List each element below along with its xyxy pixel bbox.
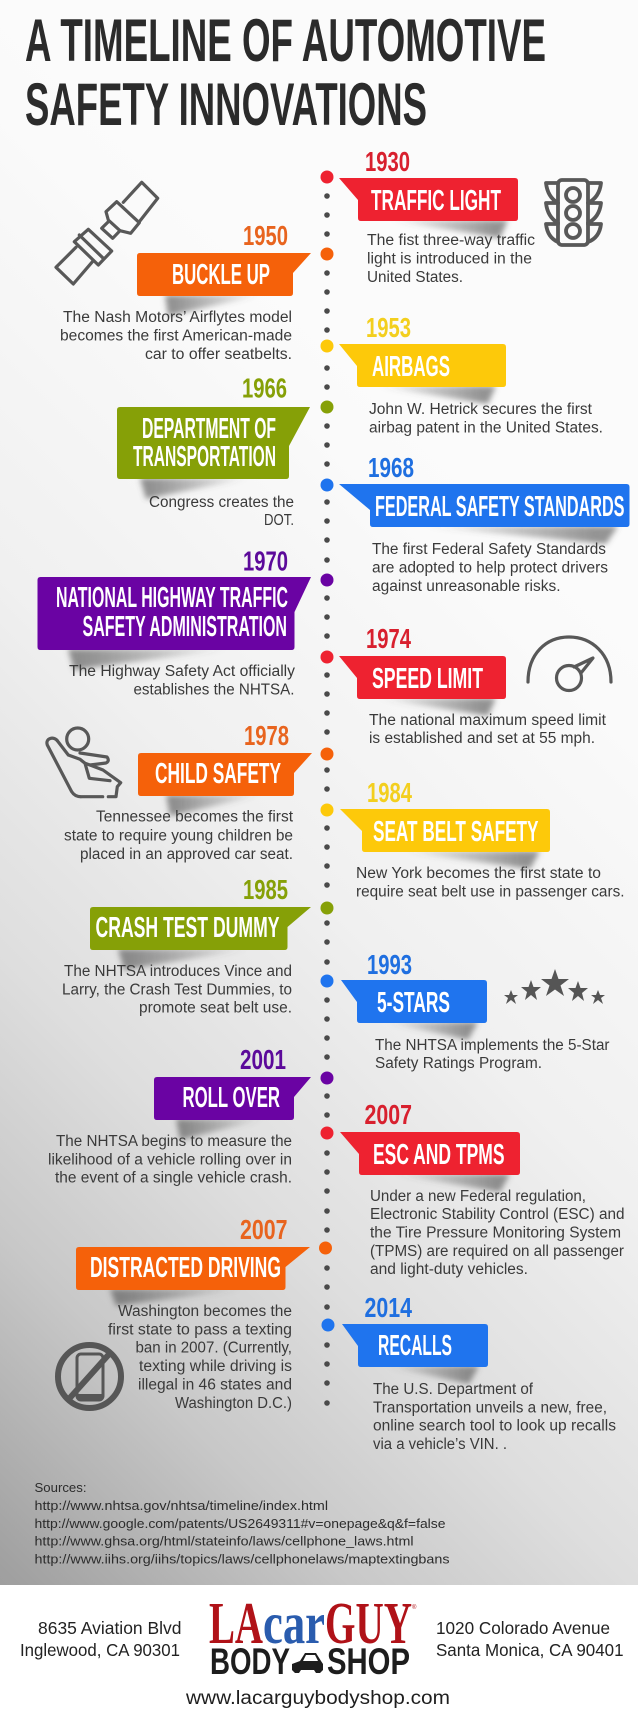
panel: 2007 distracted driving: illegal in 46 states and [138, 1376, 292, 1394]
panel: 1985 crash test dummy: The NHTSA introduces Vince and [64, 963, 292, 980]
panel: 2007 distracted driving: first state to pass a texting [108, 1322, 292, 1338]
panel: 1984 seat belt safety: 1984 [367, 777, 412, 808]
logo: BODY [210, 1641, 290, 1682]
panel: 1978 child safety: Tennessee becomes the first [96, 808, 294, 826]
panel: 2014 recalls [342, 1292, 616, 1453]
panel: 2014 recalls: The U.S. Department of [373, 1381, 534, 1398]
panel: 1974 speed limit: is established and set at 55 mph. [369, 730, 595, 747]
panel: 1978 child safety: state to require young children be [64, 828, 293, 844]
logo: car [263, 1590, 325, 1656]
right address: Santa Monica, CA 90401 [436, 1640, 624, 1660]
panel: 1974 speed limit: The national maximum speed limit [369, 712, 607, 729]
panel: 1966 department of transportation: 1966 [242, 372, 287, 404]
panel: 2007 esc and tpms: the Tire Pressure Monitoring System [370, 1224, 621, 1242]
panel: 1974 speed limit: SPEED LIMIT [372, 663, 483, 695]
panel: 2007 distracted driving: DISTRACTED DRIVING [90, 1252, 281, 1284]
panel: 2001 roll over: the event of a single vehicle crash. [55, 1170, 292, 1186]
panel: 1950 buckle up [60, 220, 311, 363]
panel: 1970 nhtsa: establishes the NHTSA. [134, 682, 294, 698]
panel: 1950 buckle up: car to offer seatbelts. [145, 346, 292, 363]
panel: 2001 roll over: The NHTSA begins to measure the [56, 1133, 292, 1150]
panel: 1985 crash test dummy: CRASH TEST DUMMY [96, 912, 280, 944]
panel: 1953 airbags: airbag patent in the United States. [369, 420, 603, 436]
panel: 1970 nhtsa: 1970 [243, 546, 288, 576]
panel: 2007 distracted driving: Washington D.C.) [175, 1395, 292, 1412]
panel: 2007 distracted driving: texting while driving is [139, 1358, 292, 1375]
panel: 1985 crash test dummy: 1985 [243, 874, 288, 905]
icon: speedometer [528, 637, 611, 690]
panel: 1966 department of transportation: DEPARTMENT OF [142, 413, 276, 445]
sources: http://www.ghsa.org/html/stateinfo/laws/cellphone_laws.html [34, 1534, 414, 1548]
panel: 2001 roll over: likelihood of a vehicle rolling over in [48, 1152, 292, 1168]
icon: child car seat [47, 728, 121, 797]
icon: traffic light [546, 180, 601, 245]
panel: 1966 department of transportation: Congress creates the [149, 494, 294, 511]
panel: 1968 federal safety standards: against unreasonable risks. [372, 578, 560, 595]
panel: 2014 recalls: via a vehicle’s VIN. . [373, 1436, 507, 1453]
panel: 1978 child safety: placed in an approved car seat. [80, 846, 293, 863]
panel: 1966 department of transportation [117, 372, 310, 529]
website: www.lacarguybodyshop.com [185, 1688, 450, 1709]
panel: 1968 federal safety standards: are adopted to help protect drivers [372, 560, 608, 576]
panel: 2014 recalls: Transportation unveils a new, free, [373, 1400, 607, 1416]
panel: 2007 esc and tpms: 2007 [364, 1099, 412, 1130]
timeline dotted spine [324, 193, 330, 1406]
logo: ® [412, 1604, 417, 1611]
panel: 1930 traffic light: 1930 [365, 146, 410, 177]
panel: 1985 crash test dummy: promote seat belt use. [139, 1000, 292, 1016]
panel: 1970 nhtsa: The Highway Safety Act officially [69, 663, 295, 680]
panel: 1930 traffic light: The fist three-way traffic [367, 232, 535, 249]
sources: http://www.nhtsa.gov/nhtsa/timeline/index.html [34, 1498, 328, 1513]
panel: 1953 airbags: John W. Hetrick secures the first [369, 401, 593, 418]
panel: 1985 crash test dummy [62, 874, 311, 1016]
panel: 1984 seat belt safety: New York becomes the first state to [356, 865, 601, 882]
panel: 2001 roll over: ROLL OVER [182, 1082, 280, 1114]
panel: 2007 distracted driving: Washington becomes the [118, 1303, 292, 1320]
panel: 2007 distracted driving: ban in 2007. (Currently, [136, 1340, 292, 1356]
panel: 1970 nhtsa [38, 546, 311, 698]
panel: 2014 recalls: 2014 [364, 1292, 412, 1323]
panel: 1930 traffic light: TRAFFIC LIGHT [371, 185, 501, 217]
left address: Inglewood, CA 90301 [20, 1640, 180, 1660]
sources [34, 1480, 450, 1566]
right address [436, 1618, 624, 1660]
panel: 1978 child safety: 1978 [244, 720, 289, 751]
panel: 1993 5-stars: The NHTSA implements the 5-Star [375, 1037, 610, 1054]
sources: http://www.iihs.org/iihs/topics/laws/cellphonelaws/maptextingbans [34, 1552, 450, 1566]
sources: http://www.google.com/patents/US2649311#v=onepage&q&f=false [34, 1516, 445, 1531]
panel: 2007 esc and tpms: (TPMS) are required on all passenger [370, 1243, 624, 1260]
panel: 1966 department of transportation: DOT. [264, 512, 294, 529]
panel: 1970 nhtsa: SAFETY ADMINISTRATION [82, 611, 287, 643]
panel: 1993 5-stars: 5-STARS [377, 987, 450, 1019]
panel: 1950 buckle up: becomes the first American-made [60, 328, 292, 344]
panel: 2007 esc and tpms: Under a new Federal regulation, [370, 1188, 586, 1205]
panel: 1974 speed limit: 1974 [366, 623, 411, 654]
panel: 1970 nhtsa: NATIONAL HIGHWAY TRAFFIC [56, 582, 288, 614]
panel: 1984 seat belt safety [340, 777, 624, 900]
panel: 1974 speed limit [339, 623, 607, 747]
footer [0, 1585, 638, 1727]
panel: 1953 airbags [339, 312, 603, 436]
panel: 1985 crash test dummy: Larry, the Crash Test Dummies, to [62, 982, 292, 998]
panel: 2007 esc and tpms: ESC AND TPMS [373, 1139, 504, 1171]
logo: LA [209, 1590, 263, 1656]
panel: 2007 esc and tpms [340, 1099, 624, 1278]
panel: 1984 seat belt safety: require seat belt use in passenger cars. [356, 884, 624, 900]
logo: GUY [325, 1590, 412, 1656]
icon: seatbelt [56, 182, 158, 284]
panel: 2007 esc and tpms: and light-duty vehicles. [370, 1261, 528, 1278]
right address: 1020 Colorado Avenue [436, 1618, 610, 1638]
panel: 1950 buckle up: 1950 [243, 220, 288, 251]
panel: 1968 federal safety standards: 1968 [368, 452, 414, 483]
left address [20, 1618, 182, 1660]
logo: SHOP [327, 1641, 410, 1682]
panel: 2001 roll over [48, 1044, 311, 1186]
icon: no phone [58, 1345, 121, 1408]
panel: 1953 airbags: AIRBAGS [372, 351, 450, 383]
panel: 1993 5-stars: Safety Ratings Program. [375, 1055, 542, 1072]
panel: 2014 recalls: online search tool to look up recalls [373, 1418, 616, 1434]
panel: 1950 buckle up: The Nash Motors’ Airflytes model [63, 309, 292, 326]
panel: 1968 federal safety standards [339, 452, 630, 595]
panel: 1993 5-stars [341, 949, 610, 1072]
logo [209, 1590, 417, 1682]
timeline coloured markers [319, 170, 334, 1332]
panel: 1950 buckle up: BUCKLE UP [172, 259, 270, 291]
panel: 1930 traffic light: light is introduced in the [367, 250, 532, 268]
sources: Sources: [34, 1480, 86, 1495]
panel: 2007 esc and tpms: Electronic Stability Control (ESC) and [370, 1206, 624, 1223]
panel: 2001 roll over: 2001 [240, 1044, 286, 1075]
title [25, 7, 546, 138]
icon: five stars [504, 969, 605, 1004]
panel: 2007 distracted driving: 2007 [240, 1214, 288, 1245]
panel: 1966 department of transportation: TRANSPORTATION [133, 441, 276, 473]
panel: 1993 5-stars: 1993 [367, 949, 412, 980]
panel: 2014 recalls: RECALLS [378, 1330, 452, 1362]
panel: 1953 airbags: 1953 [366, 312, 411, 343]
panel: 1978 child safety [64, 720, 312, 863]
panel: 1968 federal safety standards: The first Federal Safety Standards [372, 541, 606, 558]
panel: 1930 traffic light [339, 146, 535, 286]
left address: 8635 Aviation Blvd [38, 1618, 182, 1638]
panel: 1930 traffic light: United States. [367, 269, 463, 286]
panel: 1978 child safety: CHILD SAFETY [155, 758, 281, 790]
panel: 2007 distracted driving [76, 1214, 310, 1412]
